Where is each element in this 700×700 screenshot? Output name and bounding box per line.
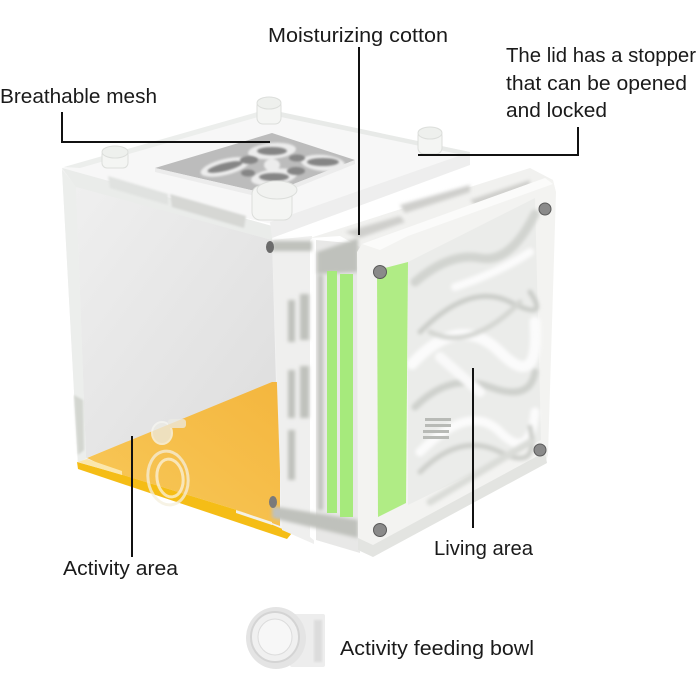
callout line: moisturizing cotton [358, 47, 360, 235]
panel: moisturizing cotton green strips [327, 262, 408, 517]
callout line: breathable mesh [62, 112, 270, 142]
label: living area: Living area [434, 538, 534, 560]
label: lid stopper: The lid has a stopper [506, 45, 696, 67]
icon: screws [374, 203, 551, 536]
label: breathable mesh: Breathable mesh [0, 86, 157, 108]
panel: living area face [357, 178, 556, 557]
panel: layered side plates [266, 168, 553, 553]
label: lid stopper [506, 45, 696, 122]
label: activity area: Activity area [63, 558, 179, 580]
icon: breathable mesh [155, 133, 355, 199]
callout line: living area [472, 368, 474, 528]
panel: yellow floor [77, 382, 292, 539]
label: lid stopper: and locked [506, 100, 607, 122]
icon: feeding ring on pane [144, 419, 192, 508]
product: ant farm box [62, 97, 556, 557]
label: moisturizing cotton: Moisturizing cotton [268, 25, 448, 47]
icon: activity feeding bowl [246, 607, 325, 669]
label: lid stopper: that can be opened [506, 73, 687, 95]
callout line: lid stopper [418, 127, 578, 155]
icon: lid posts [102, 97, 442, 220]
panel: activity area left pane [62, 168, 282, 530]
panel: lid [62, 109, 470, 240]
callout line: activity area [131, 436, 133, 557]
panel: top of stack [310, 168, 553, 247]
label: activity feeding bowl: Activity feeding bowl [340, 638, 534, 660]
